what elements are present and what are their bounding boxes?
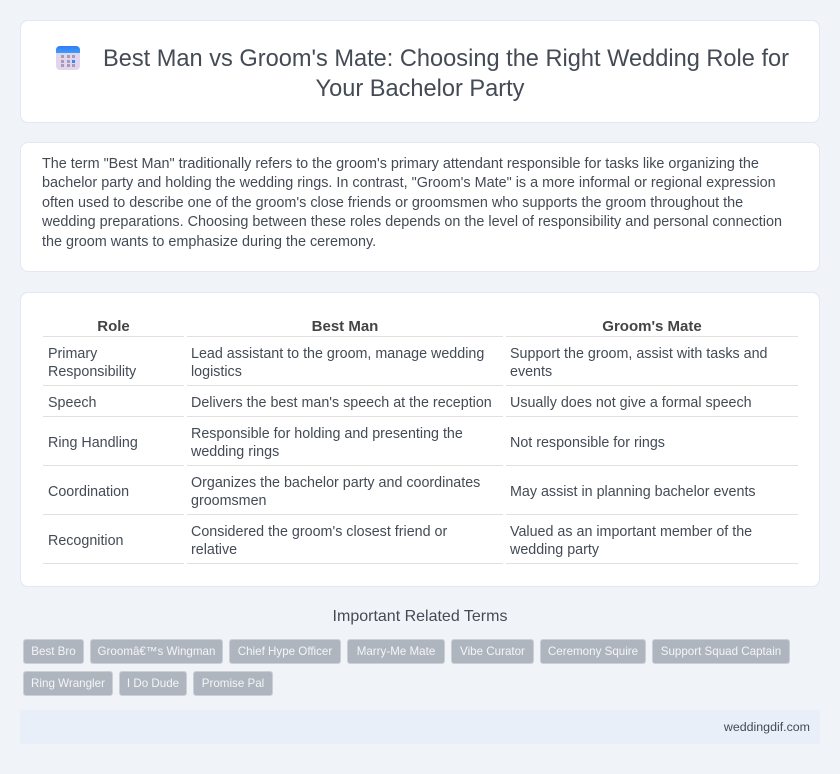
tag: Groomâ€™s Wingman bbox=[98, 645, 215, 658]
tag bbox=[652, 639, 790, 664]
row: coordination: Coordination bbox=[48, 484, 129, 500]
icon: calendar bbox=[56, 46, 80, 70]
row: coordination: May assist in planning bachelor events bbox=[510, 484, 756, 500]
tag bbox=[23, 671, 113, 696]
intro paragraph: The term "Best Man" traditionally refers to the groom's primary attendant responsible for tasks like organizing the bbox=[42, 156, 759, 172]
tag bbox=[229, 639, 341, 664]
title bbox=[103, 46, 789, 102]
related term tags bbox=[23, 639, 790, 696]
row: coordination: groomsmen bbox=[191, 493, 266, 509]
row: coordination: Organizes the bachelor party and coordinates bbox=[191, 475, 480, 491]
row: primary responsibility: Responsibility bbox=[48, 364, 136, 380]
row: recognition bbox=[48, 524, 752, 558]
intro text panel bbox=[20, 142, 820, 272]
row: speech: Delivers the best man's speech at the reception bbox=[191, 395, 492, 411]
row: ring handling bbox=[48, 426, 665, 460]
tag: Ring Wrangler bbox=[31, 677, 105, 690]
row: recognition: wedding party bbox=[510, 542, 599, 558]
intro paragraph bbox=[42, 156, 782, 250]
tag bbox=[119, 671, 187, 696]
row: recognition: Considered the groom's closest friend or bbox=[191, 524, 447, 540]
row: speech: Speech bbox=[48, 395, 96, 411]
row: primary responsibility bbox=[48, 346, 767, 380]
footer source: weddingdif.com bbox=[724, 720, 810, 734]
row: ring handling: Ring Handling bbox=[48, 435, 138, 451]
row: recognition: Valued as an important member of the bbox=[510, 524, 752, 540]
tag: Chief Hype Officer bbox=[238, 645, 332, 658]
tag: Support Squad Captain bbox=[661, 645, 781, 658]
tag bbox=[23, 639, 84, 664]
tag: Promise Pal bbox=[202, 677, 264, 690]
table header: Groom's Mate bbox=[602, 318, 702, 335]
row: recognition: relative bbox=[191, 542, 237, 558]
title: Best Man vs Groom's Mate: Choosing the Right Wedding Role for bbox=[103, 46, 789, 72]
intro paragraph: often used to describe one of the groom's close friends or groomsmen who supports the groom throughout the bbox=[42, 195, 743, 211]
tag: Best Bro bbox=[31, 645, 76, 658]
tag: Ceremony Squire bbox=[548, 645, 638, 658]
title card bbox=[20, 20, 820, 123]
table header bbox=[97, 318, 702, 335]
comparison table panel bbox=[20, 292, 820, 587]
tag bbox=[193, 671, 273, 696]
intro paragraph: the groom wants to emphasize during the ceremony. bbox=[42, 234, 376, 250]
footer bar bbox=[20, 710, 820, 744]
row: primary responsibility: Support the groom, assist with tasks and bbox=[510, 346, 767, 362]
table header: Best Man bbox=[312, 318, 378, 335]
table bbox=[43, 318, 798, 564]
related terms heading: Important Related Terms bbox=[333, 608, 507, 625]
tag: Vibe Curator bbox=[460, 645, 525, 658]
tag bbox=[90, 639, 223, 664]
tag bbox=[347, 639, 445, 664]
intro paragraph: bachelor party and holding the wedding rings. In contrast, "Groom's Mate" is a more informal or regional expression bbox=[42, 175, 776, 191]
row: primary responsibility: logistics bbox=[191, 364, 242, 380]
tag bbox=[451, 639, 534, 664]
row: speech bbox=[48, 395, 752, 411]
table header: Role bbox=[97, 318, 130, 335]
tag: Marry-Me Mate bbox=[357, 645, 435, 658]
row: primary responsibility: events bbox=[510, 364, 552, 380]
tag bbox=[540, 639, 646, 664]
row: primary responsibility: Primary bbox=[48, 346, 97, 362]
intro paragraph: wedding preparations. Choosing between these roles depends on the level of responsibility and personal connection bbox=[42, 214, 782, 230]
row: speech: Usually does not give a formal speech bbox=[510, 395, 752, 411]
row: primary responsibility: Lead assistant to the groom, manage wedding bbox=[191, 346, 484, 362]
row: ring handling: Responsible for holding and presenting the bbox=[191, 426, 463, 442]
row: ring handling: wedding rings bbox=[191, 444, 279, 460]
title: Your Bachelor Party bbox=[316, 76, 524, 102]
row: coordination bbox=[48, 475, 756, 509]
row: ring handling: Not responsible for rings bbox=[510, 435, 665, 451]
tag: I Do Dude bbox=[127, 677, 179, 690]
row: recognition: Recognition bbox=[48, 533, 124, 549]
